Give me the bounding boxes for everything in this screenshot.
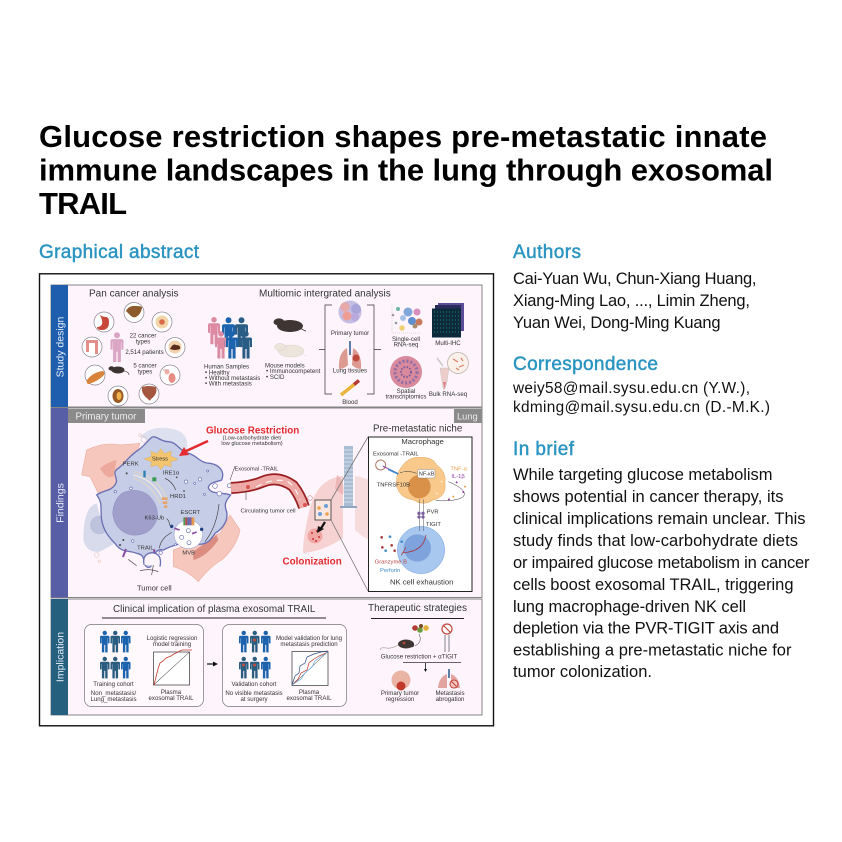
training cohort card: Non_metastasis/	[91, 690, 136, 697]
pre-metastatic niche inset: Exosomal -TRAIL	[373, 451, 419, 457]
mouse models: • SCID	[266, 374, 285, 381]
pre-metastatic niche inset: Perforin	[380, 568, 400, 574]
arrow	[207, 663, 214, 665]
training cohort card: Plasma	[161, 689, 182, 696]
correspondence: Correspondence	[513, 354, 658, 375]
single-cell umap	[392, 304, 422, 333]
human samples: • Healthy	[205, 370, 230, 376]
tumor cell diagram: HRD1	[170, 494, 186, 500]
tab: lung: Lung	[457, 412, 478, 422]
human samples: Human Samples	[204, 364, 249, 370]
cohort text	[125, 332, 164, 376]
in brief: In brief	[513, 439, 575, 460]
cohort text: 5 cancer	[133, 362, 157, 370]
pre-metastatic niche inset: Macrophage	[401, 437, 444, 446]
lungs with colonization: Colonization	[282, 556, 342, 568]
primary tumor regression	[381, 670, 419, 703]
pre-metastatic niche inset: NF-κB	[419, 471, 435, 477]
ROC validation	[292, 651, 328, 686]
authors: Yuan Wei, Dong-Ming Kuang	[513, 314, 720, 332]
panel: study design: Study design	[54, 316, 66, 377]
omics modalities: Spatial	[397, 388, 415, 395]
tab: primary tumor	[68, 409, 145, 423]
inset marker	[315, 500, 331, 520]
pre-metastatic niche inset	[368, 424, 472, 592]
macrophage	[396, 457, 445, 503]
metastasis abrogation: abrogation	[436, 696, 464, 703]
glucose restriction callout	[179, 426, 299, 456]
training cohort card: model training	[153, 641, 191, 648]
title: Glucose restriction shapes pre-metastatic innate	[39, 119, 767, 154]
training cohort card	[84, 624, 204, 706]
mouse with diet and anti-TIGIT: Glucose restriction + αTIGIT	[381, 654, 458, 660]
pan cancer analysis	[82, 288, 185, 406]
main tumor cell body	[97, 437, 231, 567]
primary tumor, lung tissue, blood samples: Lung tissues	[333, 368, 367, 374]
in brief: or impaired glucose metabolism in cancer	[513, 554, 810, 572]
lungs with colonization	[282, 437, 393, 591]
glucose restriction callout: Glucose Restriction	[206, 426, 299, 436]
cohort text: 2,514 patients	[125, 349, 164, 356]
in brief: lung macrophage-driven NK cell	[513, 598, 746, 616]
validation cohort card: No visible metastasis	[225, 690, 283, 697]
validation cohort card: Validation cohort	[232, 681, 277, 688]
human figure	[110, 332, 124, 362]
tab: primary tumor: Primary tumor	[76, 412, 137, 422]
in brief: While targeting glucose metabolism	[513, 466, 772, 484]
tumor cell diagram: Stress	[152, 457, 168, 463]
pre-metastatic niche inset: IL-1β	[451, 474, 465, 480]
tumor cell diagram	[82, 428, 240, 592]
glucose restriction callout: (Low-carbohydrate diet/	[223, 436, 282, 442]
tumor cell diagram: IRE1α	[163, 470, 180, 476]
correspondence	[512, 354, 770, 416]
primary tumor regression: Primary tumor	[381, 690, 419, 697]
authors: Cai-Yuan Wu, Chun-Xiang Huang,	[513, 270, 756, 288]
mouse models	[259, 288, 391, 381]
ER membranes	[133, 472, 167, 503]
membrane invagination	[144, 553, 161, 567]
validation cohort card: metastasis prediction	[280, 641, 338, 648]
NK cell	[397, 526, 445, 574]
multi-IHC stack	[432, 303, 464, 338]
spatial section	[390, 356, 422, 388]
correspondence: weiy58@mail.sysu.edu.cn (Y.W.),	[512, 380, 750, 397]
tumor cell diagram: Tumor cell	[137, 583, 172, 592]
pre-metastatic niche inset: TNF-α	[450, 467, 468, 473]
training cohort card: Logistic regression	[147, 635, 197, 642]
mouse	[108, 366, 129, 375]
panel: implication	[51, 599, 482, 715]
panel: findings	[51, 408, 482, 598]
nucleus	[113, 490, 157, 535]
primary tumor regression: regression	[386, 696, 414, 703]
cohort text: 22 cancer	[130, 332, 156, 340]
training cohort card: Lung_metastasis	[90, 696, 137, 703]
metastasis abrogation: Metastasis	[435, 690, 465, 697]
human samples: • With metastasis	[205, 380, 252, 388]
validation cohort card: at surgery	[240, 696, 268, 703]
clinical implication: Clinical implication of plasma exosomal TRAIL	[113, 604, 316, 615]
stress star	[144, 449, 178, 470]
tumor cell diagram: TRAIL	[137, 546, 154, 552]
pre-metastatic niche inset: TNFRSF10B	[377, 482, 410, 488]
mouse models: • Immunocompetent	[266, 368, 321, 375]
pre-metastatic niche inset: Granzyme B	[375, 560, 407, 566]
primary tumor, lung tissue, blood samples	[331, 300, 369, 406]
pan cancer analysis: Pan cancer analysis	[89, 288, 178, 300]
in brief	[513, 439, 810, 681]
labels inside cell: PERK	[123, 461, 139, 467]
training cohort card: exosomal TRAIL	[149, 695, 194, 702]
validation cohort card	[222, 624, 346, 706]
pathway arrows	[128, 478, 219, 575]
in brief: study finds that low-carbohydrate diets	[513, 532, 798, 550]
tumor cell diagram: K63-Ub	[144, 516, 164, 522]
human samples	[204, 317, 260, 388]
mouse models: Multiomic intergrated analysis	[259, 288, 391, 300]
title	[39, 119, 773, 221]
cohort text: types	[136, 338, 150, 346]
exosome and receptor	[376, 460, 386, 470]
title: TRAIL	[39, 186, 127, 221]
primary tumor, lung tissue, blood samples: Blood	[342, 399, 358, 406]
pre-metastatic niche inset: Pre-metastatic niche	[373, 424, 463, 434]
sample brackets	[319, 305, 381, 394]
figure frame	[40, 274, 494, 726]
organ icons ring	[82, 302, 185, 406]
panel: study design	[51, 285, 482, 407]
in brief: clinical implications remain unclear. This	[513, 510, 806, 528]
validation cohort card: exosomal TRAIL	[287, 695, 332, 702]
glucose restriction callout: low glucose metabolism)	[221, 441, 283, 447]
validation cohort card: Plasma	[299, 689, 320, 696]
omics modalities: Bulk RNA-seq	[429, 391, 467, 398]
validation cohort card: Model validation for lung	[276, 635, 342, 642]
in brief: establishing a pre-metastatic niche for	[513, 642, 792, 660]
authors: Authors	[513, 242, 581, 263]
blood vessel with circulating tumor cell: Exosomal -TRAIL	[234, 466, 278, 472]
PVR TIGIT	[419, 499, 423, 531]
in brief: depletion via the PVR-TIGIT axis and	[513, 620, 779, 638]
exosome vesicles outside	[94, 434, 147, 563]
pre-metastatic niche inset: TIGIT	[426, 522, 441, 528]
bulk tube	[437, 352, 468, 390]
MVB	[174, 520, 203, 549]
omics modalities: Single-cell	[392, 336, 420, 343]
metastasis abrogation	[435, 669, 465, 703]
primary tumor, lung tissue, blood samples: Primary tumor	[331, 330, 369, 337]
ROC training	[154, 650, 192, 685]
neighbouring cells	[82, 443, 140, 503]
cohort text: types	[138, 368, 152, 376]
trail transmembrane	[123, 549, 154, 558]
blood vessel with circulating tumor cell: Circulating tumor cell	[240, 508, 296, 514]
in brief: tumor colonization.	[513, 663, 652, 681]
title: immune landscapes in the lung through exosomal	[39, 152, 773, 188]
panel: implication: Implication	[54, 632, 66, 682]
omics modalities	[386, 303, 468, 400]
correspondence: kdming@mail.sysu.edu.cn (D.-M.K.)	[513, 399, 770, 416]
pre-metastatic niche inset: NK cell exhaustion	[390, 578, 453, 587]
panel: findings: Findings	[54, 483, 66, 523]
blood vessel with circulating tumor cell	[230, 466, 312, 514]
mouse models: Mouse models	[265, 362, 305, 370]
authors	[513, 242, 756, 332]
therapeutic strategies: Therapeutic strategies	[368, 603, 467, 614]
tab: lung	[454, 409, 482, 423]
pre-metastatic niche inset: PVR	[427, 510, 439, 516]
omics modalities: RNA-seq	[394, 342, 418, 348]
heading: graphical abstract: Graphical abstract	[39, 242, 200, 263]
omics modalities: transcriptomics	[386, 394, 426, 400]
tumor cell diagram: MVB	[182, 551, 195, 557]
metastasis cluster	[308, 528, 322, 544]
authors: Xiang-Ming Lao, ..., Limin Zheng,	[513, 292, 750, 310]
omics modalities: Multi-IHC	[435, 340, 461, 347]
human samples: • Without metastasis	[205, 375, 260, 382]
in brief: cells boost exosomal TRAIL, triggering	[513, 576, 794, 594]
in brief: shows potential in cancer therapy, its	[513, 488, 784, 506]
tumor cell diagram: ESCRT	[181, 510, 201, 516]
therapeutic strategies	[368, 603, 467, 703]
clinical implication	[84, 604, 346, 706]
training cohort card: Training cohort	[93, 681, 134, 688]
